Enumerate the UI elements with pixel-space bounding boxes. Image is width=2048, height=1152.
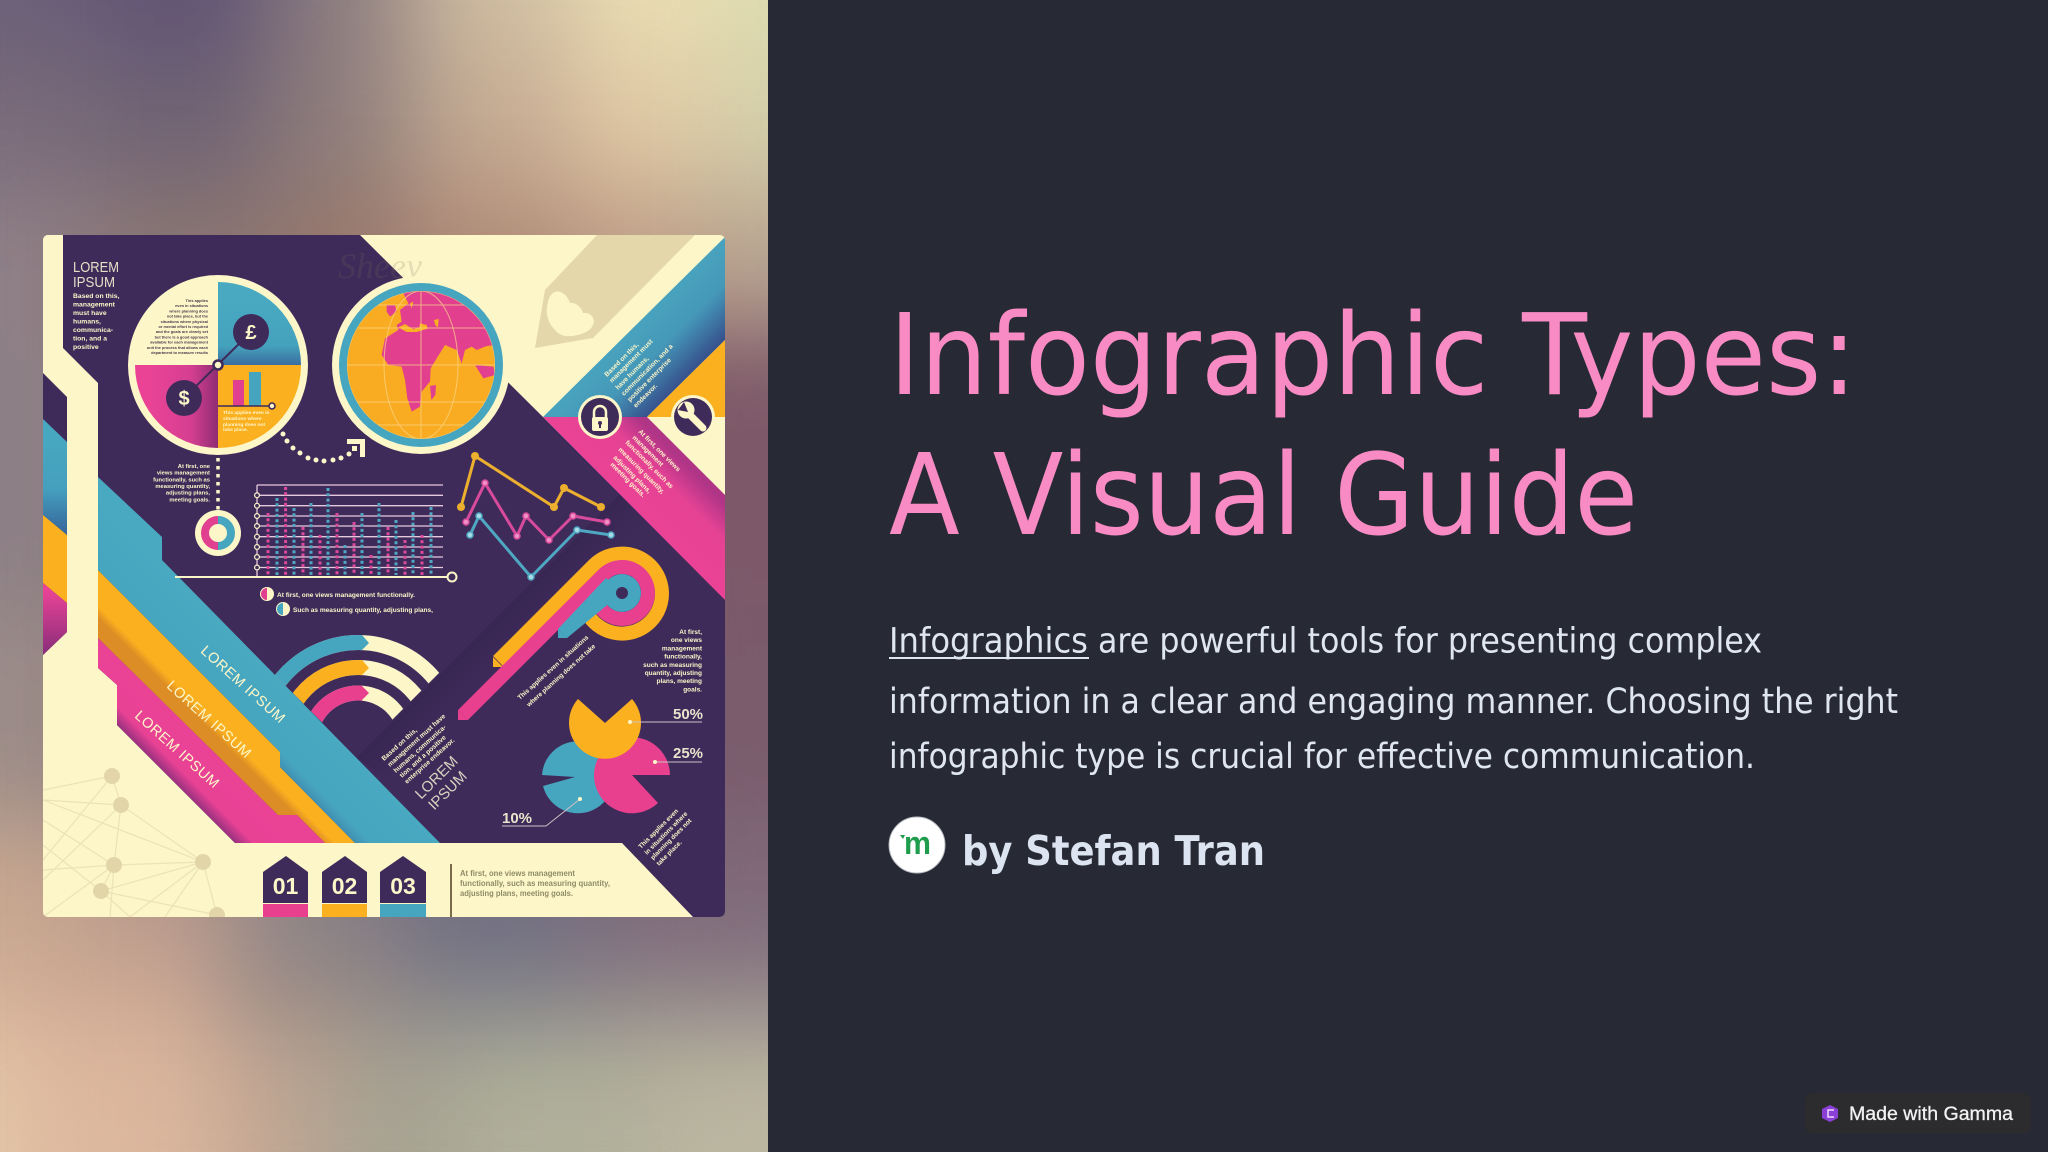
chart legend: Such as measuring quantity, adjusting plans, xyxy=(293,607,433,614)
arcs graphic xyxy=(275,635,440,722)
ribbon label: blue: LOREM IPSUM xyxy=(197,643,288,727)
right paragraph: quantity, adjusting xyxy=(645,670,702,677)
quadrant paragraph: but there is a good approach xyxy=(155,334,209,339)
pencil watermark xyxy=(535,235,695,348)
right paragraph: one views xyxy=(671,637,702,644)
side paragraph: adjusting plans, xyxy=(166,491,210,497)
quadrant paragraph: This applies xyxy=(186,298,208,303)
heading block: lorem ipsum: must have xyxy=(73,310,107,317)
intro paragraph xyxy=(889,622,1898,777)
connector line xyxy=(184,332,251,398)
ribbon label: orange: LOREM IPSUM xyxy=(163,678,254,762)
quadrant paragraph: or mental effort is required xyxy=(158,324,209,329)
quadrant paragraph: department to measure results xyxy=(151,350,208,355)
panel: right content area xyxy=(888,291,2014,1125)
rotated caption and heading xyxy=(381,713,471,814)
heading block: lorem ipsum: Based on this, xyxy=(73,293,120,300)
rotated caption and heading: Based on this, xyxy=(381,727,419,762)
band text: blue: have humans, xyxy=(614,355,651,391)
right paragraph: functionally, xyxy=(664,654,702,661)
rotated caption and heading: management must have xyxy=(387,713,447,768)
pie labels: 10% xyxy=(502,810,532,827)
panel: infographic illustration xyxy=(43,235,725,917)
number badge 03 xyxy=(380,856,426,917)
currency: dollar: $ xyxy=(178,388,190,410)
band text: pink: management xyxy=(631,434,665,469)
number badge 02 xyxy=(322,856,367,917)
author avatar xyxy=(889,817,945,873)
band text: pink: meeting goals. xyxy=(609,461,646,499)
band text: pink: functionally, such as xyxy=(624,439,675,490)
dotted arrow xyxy=(280,432,365,464)
heading block: lorem ipsum: LOREM xyxy=(73,259,119,276)
lock icon xyxy=(578,395,622,439)
ribbon label: pink: LOREM IPSUM xyxy=(131,708,222,792)
footer caption: adjusting plans, meeting goals. xyxy=(460,889,573,898)
right paragraph xyxy=(643,629,703,693)
quadrant caption xyxy=(223,410,269,433)
footer caption xyxy=(460,869,610,898)
footer divider xyxy=(450,864,452,917)
number badge 02: 02 xyxy=(332,873,357,899)
quadrant paragraph: and the goals are clearly set xyxy=(156,329,209,334)
wrench icon xyxy=(671,395,715,439)
rotated caption and heading: LOREM xyxy=(412,753,462,803)
pie labels xyxy=(502,706,703,827)
intro paragraph: information in a clear and engaging manner. Choosing the right xyxy=(889,682,1898,722)
heading block: lorem ipsum: management xyxy=(73,302,116,308)
corner caption xyxy=(637,808,694,867)
watermark script: Sheey xyxy=(338,246,422,286)
corner caption: planning does not xyxy=(649,817,694,861)
right paragraph: such as measuring xyxy=(643,662,702,669)
globe xyxy=(332,276,510,454)
pie quadrant circle xyxy=(128,275,308,455)
side paragraph: functionally, such as xyxy=(153,477,210,483)
spiral graphic xyxy=(458,554,662,720)
intro paragraph: infographic type is crucial for effective communication. xyxy=(889,737,1755,777)
side paragraph: meeting goals. xyxy=(169,497,210,503)
pie labels: 50% xyxy=(673,706,703,723)
quadrant paragraph xyxy=(147,298,209,355)
number badge 01 xyxy=(263,856,308,917)
quadrant paragraph: situations where physical xyxy=(161,319,208,324)
quadrant paragraph: not take place, but the xyxy=(167,314,209,319)
corner caption: This applies even xyxy=(637,808,680,850)
right paragraph: plans, meeting xyxy=(656,678,702,685)
currency: pound: £ xyxy=(245,322,257,344)
pie labels: 25% xyxy=(673,745,703,762)
gamma icon xyxy=(1822,1105,1838,1122)
panel: blurred image background xyxy=(0,0,768,1152)
chart legend xyxy=(260,587,433,616)
dotted connector xyxy=(216,458,220,510)
corner caption: in situations where xyxy=(643,810,690,856)
number badge 01: 01 xyxy=(273,873,298,899)
author name: by Stefan Tran xyxy=(962,827,1265,875)
right paragraph: goals. xyxy=(683,686,702,693)
made with gamma badge: Made with Gamma xyxy=(1849,1104,2013,1125)
purple field xyxy=(43,235,725,917)
band text: pink: measuring quantity, xyxy=(617,446,666,495)
rotated caption and heading: tion, and a positive xyxy=(399,734,448,779)
band text: blue: Based on this, xyxy=(603,341,640,378)
mini bar chart xyxy=(218,372,275,409)
band text: pink: adjusting plans, xyxy=(612,454,652,495)
rotated caption and heading: enterprise endeavor. xyxy=(404,737,456,785)
heading block: lorem ipsum: positive xyxy=(73,344,99,351)
made with gamma badge xyxy=(1805,1093,2031,1134)
author avatar: m xyxy=(904,825,931,861)
band text: blue: communication, and a xyxy=(620,343,675,397)
rotated caption and heading: IPSUM xyxy=(425,768,471,814)
corner caption: take place. xyxy=(655,839,684,867)
side paragraph xyxy=(153,464,211,503)
left edge colour strips xyxy=(43,419,67,655)
ring icon xyxy=(195,510,241,556)
quadrant paragraph: available for each management xyxy=(150,340,209,345)
footer caption: At first, one views management xyxy=(460,869,575,878)
title xyxy=(889,291,1857,561)
quadrant caption: take place. xyxy=(223,427,249,433)
band text: blue: endeavor. xyxy=(632,383,659,409)
quadrant paragraph: unit the process that allows each xyxy=(147,345,209,350)
side paragraph: views management xyxy=(157,471,210,477)
heading block: lorem ipsum xyxy=(73,259,120,351)
top right diagonal bands xyxy=(543,237,725,600)
currency: pound xyxy=(233,314,269,350)
quadrant caption: situations where xyxy=(223,416,262,422)
pie fragments chart xyxy=(542,699,670,813)
side paragraph: measuring quantity, xyxy=(155,484,210,490)
rotated caption and heading: humans, communica- xyxy=(393,724,448,774)
band text: pink xyxy=(609,428,682,499)
intro paragraph: are powerful tools for presenting complex xyxy=(1098,622,1762,662)
network watermark xyxy=(43,768,225,923)
right paragraph: At first, xyxy=(679,629,702,636)
heading block: lorem ipsum: communica- xyxy=(73,327,113,334)
currency: dollar xyxy=(166,380,202,416)
quadrant paragraph: even in situations xyxy=(175,303,208,308)
diagonal ribbons xyxy=(98,477,440,843)
footer caption: functionally, such as measuring quantity, xyxy=(460,879,610,888)
right paragraph: management xyxy=(662,645,703,652)
title: Infographic Types: xyxy=(889,291,1857,421)
quadrant paragraph: where planning does xyxy=(168,308,208,313)
heading block: lorem ipsum: humans, xyxy=(73,318,101,326)
spiral caption: This applies even in situations xyxy=(517,634,591,701)
number badge 03: 03 xyxy=(390,873,416,899)
quadrant caption: This applies even in xyxy=(223,410,269,416)
band text: blue: management must xyxy=(608,338,655,384)
band text: blue xyxy=(603,338,675,409)
line chart xyxy=(457,452,614,580)
band text: blue: positive enterprise xyxy=(626,357,673,403)
heading block: lorem ipsum: IPSUM xyxy=(73,274,115,291)
title: A Visual Guide xyxy=(889,431,1638,561)
side paragraph: At first, one xyxy=(178,464,211,470)
intro paragraph: Infographics xyxy=(889,622,1088,662)
quadrant caption: planning does not xyxy=(223,422,265,428)
dotted bar chart xyxy=(175,485,456,582)
chart legend: At first, one views management functionally. xyxy=(277,592,415,599)
spiral caption: where planning does not take xyxy=(525,643,597,709)
heading block: lorem ipsum: tion, and a xyxy=(73,336,107,342)
band text: pink: At first, one views xyxy=(637,428,682,474)
darker diagonal shadow xyxy=(357,492,660,790)
